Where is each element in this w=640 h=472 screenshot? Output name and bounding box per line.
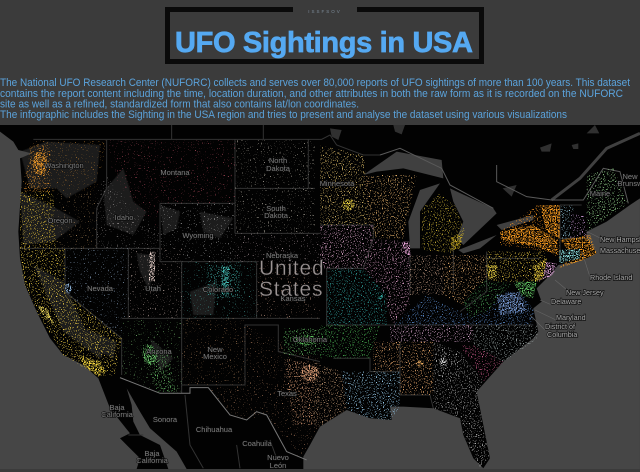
western state labels: New: [622, 172, 638, 181]
western state labels: Coahuila: [242, 439, 273, 448]
mountain shading: [20, 142, 233, 372]
western state labels: Arizona: [146, 347, 173, 356]
land base: [0, 125, 640, 469]
western state labels: Nebraska: [266, 251, 299, 260]
western state labels: California: [101, 410, 134, 419]
western state labels: Nevada: [87, 284, 114, 293]
map of USA sightings: [0, 125, 640, 470]
northeast state labels: Rhode Island: [590, 273, 632, 282]
western state labels: [44, 156, 640, 470]
western state labels: Maine: [590, 189, 610, 198]
intro text: [0, 77, 630, 121]
northeast state labels: Maryland: [556, 313, 586, 322]
western state labels: Chihuahua: [196, 425, 233, 434]
western state labels: Oregon: [47, 216, 73, 225]
country label: United: [259, 257, 325, 280]
Great Lakes and rivers: [330, 125, 640, 253]
sighting dots: medium: [20, 145, 628, 468]
intro text: The infographic includes the Sighting in the USA region and tries to present and analyse the dataset using various visualizations: [0, 109, 567, 121]
Pacific ocean: [0, 132, 187, 469]
intro text: site as well as a refined, standardized form that also contains lat/lon coordinates.: [0, 98, 359, 110]
western state labels: León: [270, 461, 286, 470]
intro text: contains the report content including the time, location duration, and other attributes in both the raw form as it is recorded on the NUFORC: [0, 88, 623, 100]
title frame: [165, 7, 484, 64]
Gulf of Mexico and Atlantic: [303, 198, 640, 469]
western state labels: California: [136, 456, 169, 465]
western state labels: New: [207, 345, 223, 354]
northeast state labels: District of: [545, 322, 575, 331]
state borders: [20, 125, 628, 468]
northeast state labels: [545, 235, 640, 339]
western state labels: Washington: [44, 161, 84, 170]
sighting dots: sparse: [20, 140, 320, 458]
northeast callout leader lines: [530, 232, 600, 330]
western state labels: Dakota: [264, 211, 289, 220]
title: UFO Sightings in USA: [175, 27, 473, 59]
Gulf of California: [127, 388, 187, 469]
western state labels: Nuevo: [267, 453, 289, 462]
northeast state labels: New Jersey: [566, 288, 604, 297]
northeast state labels: Delaware: [551, 297, 581, 306]
country label: States: [259, 278, 323, 301]
western state labels: Baja: [144, 449, 160, 458]
western state labels: Baja: [109, 403, 125, 412]
western state labels: Kansas: [280, 294, 306, 303]
western state labels: Colorado: [203, 285, 233, 294]
western state labels: South: [266, 204, 286, 213]
western state labels: Montana: [160, 168, 190, 177]
western state labels: Mexico: [203, 352, 227, 361]
northeast state labels: Columbia: [547, 330, 577, 339]
western state labels: Oklahoma: [293, 335, 328, 344]
western state labels: Texas: [277, 389, 297, 398]
western state labels: Idaho: [115, 213, 133, 222]
western state labels: North: [269, 156, 287, 165]
bottom strip: [0, 469, 640, 472]
small caption: ISSFSOV: [308, 9, 342, 14]
western state labels: Dakota: [266, 164, 291, 173]
western state labels: Sonora: [153, 415, 178, 424]
western state labels: Minnesota: [320, 179, 355, 188]
country label: [259, 257, 325, 301]
sighting dots: dense hot spots: [33, 152, 597, 382]
western state labels: Utah: [145, 284, 161, 293]
western state labels: Wyoming: [182, 231, 214, 240]
